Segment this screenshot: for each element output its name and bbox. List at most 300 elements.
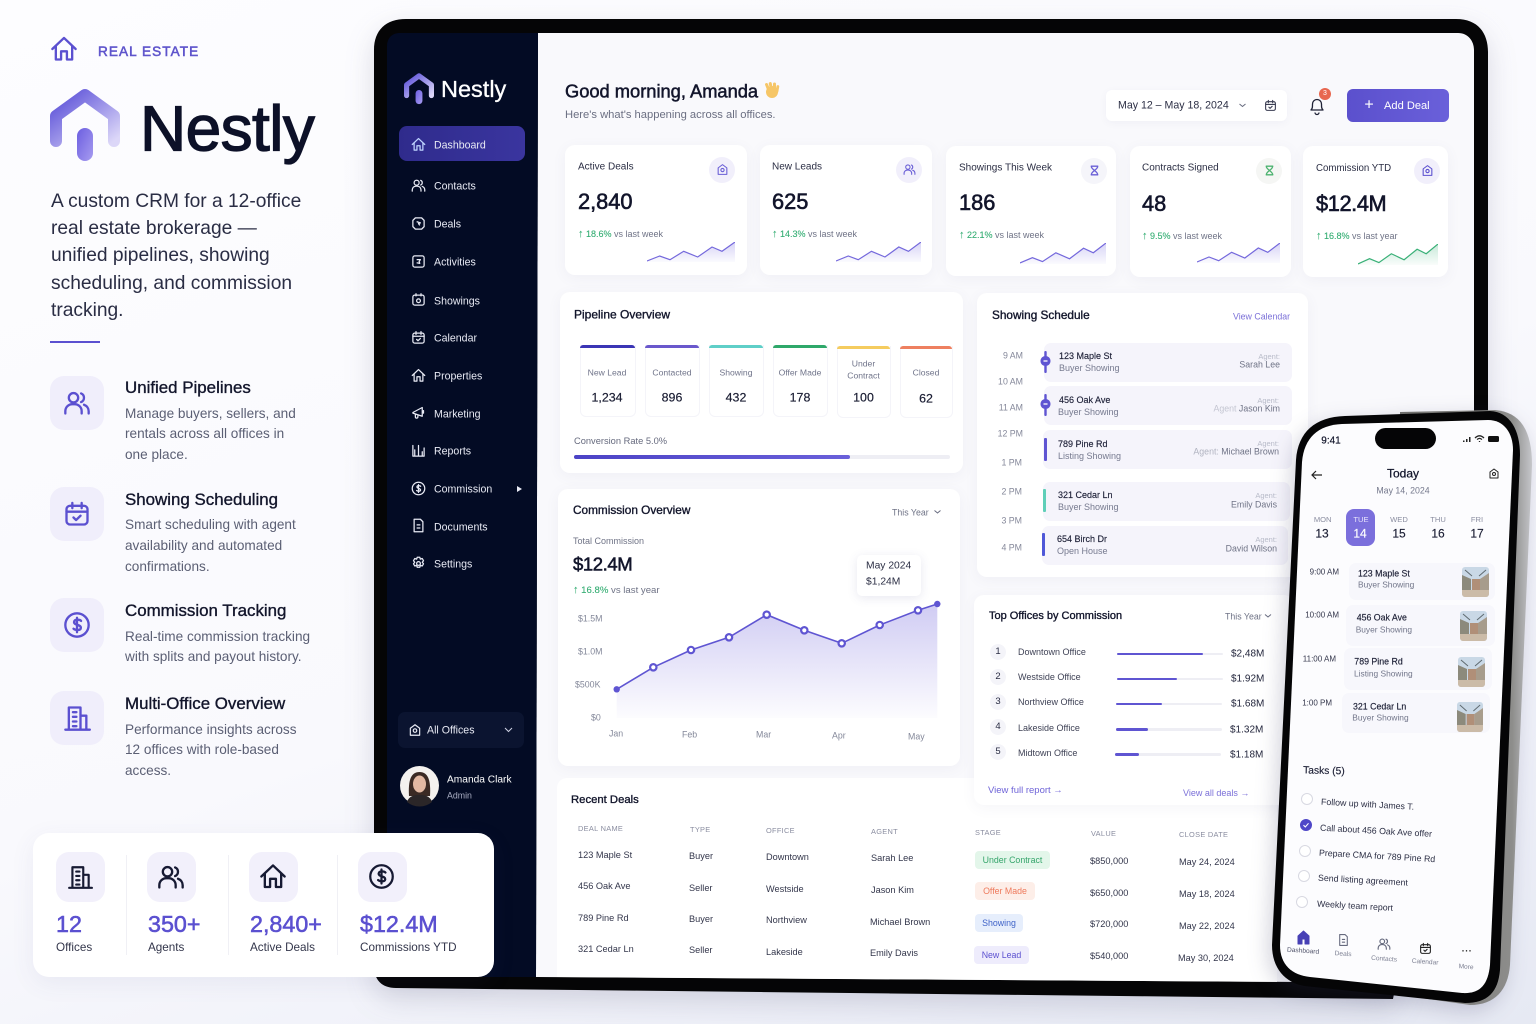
kpi change: ↑ 18.6% vs last week xyxy=(578,228,663,240)
stat: active deals: Active Deals xyxy=(250,941,315,954)
showing: 321 cedar ln: 321 Cedar Ln xyxy=(1058,490,1113,500)
panel: commission overview xyxy=(558,489,960,766)
nav label: reports: Reports xyxy=(434,445,471,457)
period selector: This Year xyxy=(892,507,929,517)
x axis labels: May xyxy=(908,731,925,741)
divider xyxy=(228,855,229,955)
week strip: MON xyxy=(1314,515,1332,524)
task: call about offer xyxy=(1300,819,1445,835)
showing: 456 oak ave: 456 Oak Ave xyxy=(1059,395,1110,405)
row: 456 oak ave: Jason Kim xyxy=(871,885,914,895)
feature text: Manage buyers, sellers, and xyxy=(125,406,296,420)
appointment: 123 maple st: 9:00 AM xyxy=(1310,568,1339,577)
icon: notification bell xyxy=(1310,98,1324,116)
showing: 456 oak ave: Buyer Showing xyxy=(1058,407,1119,417)
y axis labels: $1.5M xyxy=(578,613,602,623)
stat: offices: 12 xyxy=(56,911,82,937)
feature title: Unified Pipelines xyxy=(125,378,251,397)
row: 456 oak ave: May 18, 2024 xyxy=(1179,889,1235,899)
row: 123 maple st xyxy=(578,851,1234,869)
row: 456 oak ave: $650,000 xyxy=(1090,888,1128,898)
week strip: 13 xyxy=(1315,527,1329,541)
row: 321 cedar ln: New Lead xyxy=(982,950,1021,960)
category label: REAL ESTATE xyxy=(98,43,199,58)
task: send agreement: Send listing agreement xyxy=(1318,873,1408,888)
kpi value: $12.4M xyxy=(1316,191,1386,216)
plus sign: + xyxy=(1364,97,1374,114)
showing: 123 maple st: Agent: xyxy=(1258,352,1280,361)
panel: pipeline overview: 432 xyxy=(726,390,746,404)
icon: dashboard xyxy=(412,138,426,151)
feature text: Real-time commission tracking xyxy=(125,628,310,644)
icon: calendar xyxy=(1265,100,1276,111)
calendar link: View Calendar xyxy=(1233,311,1290,321)
feature title: Multi-Office Overview xyxy=(125,694,285,713)
time axis: 2 PM xyxy=(1001,486,1022,496)
accent rule xyxy=(50,341,100,343)
tab: calendar: Calendar xyxy=(1411,958,1439,967)
table header: VALUE xyxy=(1091,829,1116,838)
row: 123 maple st: Downtown xyxy=(766,852,809,862)
panel: pipeline overview: 1,234 xyxy=(591,390,623,404)
icon: expand arrow xyxy=(517,486,522,492)
row: 456 oak ave: Offer Made xyxy=(983,886,1027,896)
showing: 321 cedar ln: Emily Davis xyxy=(1231,499,1277,509)
showing: 789 pine rd: Listing Showing xyxy=(1058,451,1121,461)
feature text xyxy=(125,722,297,778)
time axis: 4 PM xyxy=(1001,542,1022,552)
marker: booked slot 1 xyxy=(1039,351,1052,373)
office rank 2 xyxy=(990,669,1270,687)
table header: CLOSE DATE xyxy=(1179,830,1228,839)
kpi card: active deals xyxy=(565,145,747,275)
row: 123 maple st: Buyer xyxy=(689,851,713,861)
line chart xyxy=(558,489,960,766)
appointment: 123 maple st xyxy=(1310,563,1495,600)
stat: active deals xyxy=(249,852,329,957)
row: 123 maple st: May 24, 2024 xyxy=(1179,857,1235,867)
user avatar xyxy=(400,766,439,806)
kpi value: 2,840 xyxy=(578,189,633,214)
office rank 4: 4 xyxy=(995,721,1001,732)
table header: STAGE xyxy=(975,828,1001,837)
nav label: settings: Settings xyxy=(434,558,472,570)
panel title: Pipeline Overview xyxy=(574,308,670,322)
stat: commissions ytd: Commissions YTD xyxy=(360,941,457,954)
stat: offices xyxy=(56,852,116,957)
panel: pipeline overview: Under xyxy=(852,358,875,368)
kpi icon xyxy=(709,157,735,183)
showing: 654 birch dr: 654 Birch Dr xyxy=(1057,534,1107,544)
showing: 789 pine rd: Agent: xyxy=(1257,439,1279,448)
phone mockup xyxy=(1270,408,1536,1008)
office rank 3: $1.68M xyxy=(1231,699,1264,710)
office rank 1: 1 xyxy=(995,646,1001,657)
date range picker xyxy=(1106,90,1287,121)
kpi value: 48 xyxy=(1142,191,1166,216)
screen title: Today xyxy=(1387,467,1419,481)
user role: Admin xyxy=(447,790,472,800)
office rank 3: 3 xyxy=(995,696,1001,707)
feature text: rentals across all offices in xyxy=(125,426,284,441)
feature text: one place. xyxy=(125,447,188,462)
time axis: 1 PM xyxy=(1001,457,1022,467)
row: 456 oak ave: 456 Oak Ave xyxy=(578,881,630,891)
panel: top offices by commission xyxy=(974,595,1294,805)
showing: 654 birch dr xyxy=(1042,526,1288,565)
showing: 789 pine rd: 789 Pine Rd xyxy=(1058,439,1108,449)
x axis labels: Jan xyxy=(609,728,623,738)
tab: contacts xyxy=(1369,936,1399,965)
feature text: 12 offices with role-based xyxy=(125,742,279,757)
appointment: 789 pine rd: 11:00 AM xyxy=(1303,655,1336,664)
nav label: calendar: Calendar xyxy=(434,332,477,344)
week strip: 17 xyxy=(1470,527,1484,541)
nav label: commission: Commission xyxy=(434,483,492,495)
appointment: 456 oak ave xyxy=(1308,605,1495,647)
feature text: Smart scheduling with agent xyxy=(125,517,296,532)
divider xyxy=(126,855,127,955)
showing: 456 oak ave: Agent: xyxy=(1257,396,1279,405)
stage: offer made xyxy=(773,345,828,417)
row: 456 oak ave: Seller xyxy=(689,883,712,893)
appointment: 456 oak ave: Buyer Showing xyxy=(1356,624,1412,634)
showing: 789 pine rd: Agent: Michael Brown xyxy=(1193,446,1279,456)
feature text: with splits and payout history. xyxy=(125,649,302,664)
all deals link: View all deals → xyxy=(1183,788,1249,798)
row: 789 pine rd xyxy=(578,914,1234,932)
task: weekly report: Weekly team report xyxy=(1316,899,1393,913)
row: 123 maple st: Under Contract xyxy=(983,855,1042,865)
week strip: TUE xyxy=(1353,515,1369,524)
row: 456 oak ave xyxy=(578,882,1234,900)
x axis labels xyxy=(606,726,928,742)
kpi title: Showings This Week xyxy=(959,162,1052,173)
appointment: 789 pine rd: 789 Pine Rd xyxy=(1354,656,1403,666)
week strip: 16 xyxy=(1431,527,1445,541)
appointment: 321 cedar ln: 321 Cedar Ln xyxy=(1353,701,1406,711)
row: 321 cedar ln: 321 Cedar Ln xyxy=(578,944,634,954)
tab: more: More xyxy=(1458,963,1474,971)
office rank 2: 2 xyxy=(995,671,1001,682)
task: send agreement xyxy=(1297,870,1442,886)
office rank 5: $1.18M xyxy=(1230,750,1263,761)
sparkline xyxy=(647,242,735,262)
stat: commissions ytd xyxy=(358,852,468,957)
row: 321 cedar ln: May 30, 2024 xyxy=(1178,953,1234,963)
y axis labels: $1.0M xyxy=(578,646,602,656)
feature text: availability and automated xyxy=(125,538,282,553)
panel title: Recent Deals xyxy=(571,794,639,806)
tab: more: ··· xyxy=(1462,946,1472,956)
office rank 5 xyxy=(990,744,1270,762)
table header xyxy=(578,826,1228,837)
office rank 1: $2,48M xyxy=(1231,649,1264,660)
icon: calendar xyxy=(412,331,425,344)
showing: 123 maple st: Sarah Lee xyxy=(1239,359,1280,369)
total label: Total Commission xyxy=(573,536,644,546)
stat: agents: 350+ xyxy=(148,911,200,937)
selected day xyxy=(1346,509,1375,546)
row: 123 maple st: Sarah Lee xyxy=(871,853,913,863)
table header: DEAL NAME xyxy=(578,824,623,833)
row: 123 maple st: $850,000 xyxy=(1090,856,1128,866)
showing: 321 cedar ln xyxy=(1043,482,1290,521)
kpi title: Active Deals xyxy=(578,162,634,173)
panel: pipeline overview: 100 xyxy=(853,390,874,404)
x axis labels: Apr xyxy=(832,730,846,740)
add deal button xyxy=(1347,89,1449,122)
icon: calendar xyxy=(65,502,89,526)
office rank 2: $1.92M xyxy=(1231,674,1264,685)
tasks heading: Tasks (5) xyxy=(1303,765,1345,777)
chart tooltip xyxy=(857,555,921,596)
icon: activities xyxy=(412,255,425,268)
feature: unified pipelines xyxy=(50,376,296,462)
icon: deals xyxy=(412,217,425,230)
row: 789 pine rd: 789 Pine Rd xyxy=(578,913,629,923)
feature text xyxy=(125,406,296,462)
back arrow xyxy=(1311,470,1323,480)
panel: pipeline overview: 178 xyxy=(790,390,810,404)
product description: tracking. xyxy=(51,300,124,321)
feature title: Showing Scheduling xyxy=(125,490,278,509)
kpi title: New Leads xyxy=(772,162,822,173)
row: 321 cedar ln xyxy=(578,946,1234,964)
tab: contacts: Contacts xyxy=(1371,955,1397,964)
row: 456 oak ave: Westside xyxy=(766,884,804,894)
icon: contacts xyxy=(412,180,426,192)
office rank 4: Lakeside Office xyxy=(1018,723,1080,733)
office rank 3 xyxy=(990,694,1270,712)
office rank 3: Northview Office xyxy=(1018,697,1084,707)
week strip: WED xyxy=(1390,515,1408,524)
y axis labels: $0 xyxy=(591,712,601,722)
icon: marketing xyxy=(412,406,424,419)
feature title: Commission Tracking xyxy=(125,601,286,620)
sidebar brand name: Nestly xyxy=(441,76,506,102)
total change: ↑ 16.8% vs last year xyxy=(573,584,660,596)
office rank 4 xyxy=(990,719,1270,737)
panel: pipeline overview: Closed xyxy=(913,367,939,377)
row: 321 cedar ln: $540,000 xyxy=(1090,951,1128,961)
full report link: View full report → xyxy=(988,784,1063,795)
icon: office xyxy=(410,724,420,736)
week strip: THU xyxy=(1430,515,1446,524)
sparkline xyxy=(1020,243,1106,264)
kpi change: ↑ 14.3% vs last week xyxy=(772,228,857,240)
row: 789 pine rd: Michael Brown xyxy=(870,917,930,927)
tab: calendar xyxy=(1410,941,1440,969)
tab: deals: Deals xyxy=(1334,950,1352,958)
sparkline xyxy=(836,242,921,262)
notification badge: 3 xyxy=(1323,90,1327,97)
showing: 654 birch dr: Agent: xyxy=(1255,535,1277,544)
week strip: FRI xyxy=(1471,515,1483,524)
appointment: 123 maple st: 123 Maple St xyxy=(1358,568,1410,578)
table header: AGENT xyxy=(871,827,898,836)
greeting heading: Good morning, Amanda xyxy=(565,81,758,102)
time axis: 9 AM xyxy=(1003,350,1023,360)
time axis: 3 PM xyxy=(1001,515,1022,525)
task: follow up: Follow up with James T. xyxy=(1320,797,1414,812)
week strip: 15 xyxy=(1392,527,1406,541)
nav label: showings: Showings xyxy=(434,295,480,307)
nav label: activities: Activities xyxy=(434,256,476,268)
stage: new lead xyxy=(580,345,636,417)
stat: agents: Agents xyxy=(148,941,184,954)
stat: agents xyxy=(147,852,217,957)
task: follow up xyxy=(1300,793,1445,809)
showing: 654 birch dr: David Wilson xyxy=(1226,543,1277,553)
status time: 9:41 xyxy=(1321,436,1341,447)
kpi card: showings this week xyxy=(946,146,1116,276)
panel: pipeline overview: Contract xyxy=(847,370,880,380)
office rank 1: Downtown Office xyxy=(1018,647,1086,657)
tab: deals xyxy=(1329,932,1359,960)
icon: chevron xyxy=(933,509,942,515)
task: prepare cma: Prepare CMA for 789 Pine Rd xyxy=(1319,848,1435,864)
panel title: Commission Overview xyxy=(573,503,690,517)
kpi icon xyxy=(1256,158,1282,184)
stat: offices: Offices xyxy=(56,941,92,954)
marker: booked slot 2 xyxy=(1039,394,1052,416)
user name: Amanda Clark xyxy=(447,774,512,785)
product description: unified pipelines, showing xyxy=(51,245,270,266)
icon: dollar xyxy=(64,612,90,638)
date range text: May 12 – May 18, 2024 xyxy=(1118,99,1229,111)
nav label: marketing: Marketing xyxy=(434,408,481,420)
sparkline xyxy=(1197,243,1280,263)
nav label: documents: Documents xyxy=(434,521,488,533)
stage: showing xyxy=(709,345,764,417)
button label: Add Deal xyxy=(1384,100,1430,112)
feature text: Performance insights across xyxy=(125,722,297,736)
icon: people xyxy=(64,392,90,415)
icon: settings xyxy=(412,556,424,568)
time axis: 11 AM xyxy=(999,402,1023,412)
office selector label: All Offices xyxy=(427,724,474,736)
showing: 321 cedar ln: Buyer Showing xyxy=(1058,502,1119,512)
feature text xyxy=(125,628,310,664)
office rank 5: Midtown Office xyxy=(1018,748,1077,758)
task: weekly report xyxy=(1296,896,1441,912)
nav label: dashboard: Dashboard xyxy=(434,139,486,151)
icon: chevron xyxy=(1264,613,1272,619)
icon: chevron xyxy=(1239,104,1246,107)
kpi icon xyxy=(1414,158,1440,184)
kpi value: 625 xyxy=(772,189,808,214)
product description xyxy=(51,190,301,321)
panel title: Showing Schedule xyxy=(992,308,1090,322)
kpi title: Contracts Signed xyxy=(1142,163,1219,174)
showing: 654 birch dr: Open House xyxy=(1057,546,1108,556)
nav label: deals: Deals xyxy=(434,218,461,230)
showing: 456 oak ave xyxy=(1044,386,1292,425)
icon: reports xyxy=(412,444,425,457)
kpi change: ↑ 22.1% vs last week xyxy=(959,229,1044,241)
feature: showing scheduling xyxy=(50,487,296,574)
appointment: 321 cedar ln: 1:00 PM xyxy=(1302,699,1332,708)
table header: TYPE xyxy=(690,825,711,834)
status icons xyxy=(1462,434,1500,443)
appointment: 456 oak ave: 456 Oak Ave xyxy=(1357,612,1407,622)
panel: pipeline overview: New Lead xyxy=(588,367,626,377)
row: 789 pine rd: Buyer xyxy=(689,914,713,924)
icon: commission xyxy=(412,482,426,496)
feature: multi-office overview xyxy=(50,691,297,778)
feature text: access. xyxy=(125,763,171,778)
icon: properties xyxy=(412,368,426,382)
week strip xyxy=(1310,512,1490,542)
panel title: Top Offices by Commission xyxy=(989,610,1122,622)
category icon: house outline xyxy=(51,36,77,61)
kpi icon xyxy=(1081,158,1107,184)
product description: real estate brokerage — xyxy=(51,218,257,239)
stage: under contract xyxy=(837,346,891,418)
greeting subtitle: Here's what's happening across all offices. xyxy=(565,109,776,121)
appointment: 321 cedar ln xyxy=(1304,693,1490,733)
appointment: 789 pine rd xyxy=(1306,648,1492,690)
period selector: This Year xyxy=(1225,611,1262,621)
x axis labels: Mar xyxy=(756,729,771,739)
chart tooltip: May 2024 xyxy=(866,561,911,572)
time axis xyxy=(995,348,1025,554)
showing: 321 cedar ln: Agent: xyxy=(1255,491,1277,500)
row: 789 pine rd: $720,000 xyxy=(1090,919,1128,929)
brand logo mark xyxy=(50,89,120,161)
total value: $12.4M xyxy=(573,553,632,574)
appointment: 321 cedar ln: Buyer Showing xyxy=(1352,712,1409,722)
feature text xyxy=(125,517,296,574)
screen date: May 14, 2024 xyxy=(1376,485,1430,495)
x axis labels: Feb xyxy=(682,729,697,739)
product description: scheduling, and commission xyxy=(51,273,292,294)
showing: 456 oak ave: Agent Jason Kim xyxy=(1213,403,1280,413)
kpi title: Commission YTD xyxy=(1316,163,1391,174)
stat: commissions ytd: $12.4M xyxy=(360,911,438,937)
tab: more xyxy=(1452,946,1482,974)
icon: showings xyxy=(412,293,425,306)
office rank 2: Westside Office xyxy=(1018,672,1081,682)
row: 789 pine rd: Northview xyxy=(766,915,807,925)
office selector xyxy=(398,712,524,748)
dynamic island xyxy=(1375,428,1436,449)
sidebar xyxy=(387,33,538,977)
time axis: 10 AM xyxy=(998,376,1023,386)
panel: pipeline overview: 62 xyxy=(919,391,933,405)
kpi change: ↑ 9.5% vs last week xyxy=(1142,230,1222,242)
tab: dashboard xyxy=(1288,928,1318,958)
stage: contacted xyxy=(645,345,700,417)
table header: OFFICE xyxy=(766,826,795,835)
product description: A custom CRM for a 12-office xyxy=(51,190,301,212)
kpi card: commission ytd xyxy=(1303,146,1448,277)
icon: chevron xyxy=(504,728,512,732)
feature: commission tracking xyxy=(50,598,310,664)
panel: pipeline overview: Offer Made xyxy=(779,367,821,377)
task: prepare cma xyxy=(1298,845,1443,861)
panel: pipeline overview: Showing xyxy=(720,367,752,377)
divider xyxy=(337,855,338,955)
icon: documents xyxy=(414,518,424,532)
y axis labels xyxy=(575,612,605,724)
kpi card: new leads xyxy=(760,145,932,275)
appointment: 456 oak ave: 10:00 AM xyxy=(1305,611,1339,620)
sidebar logo xyxy=(404,73,434,104)
brand name: Nestly xyxy=(140,92,314,164)
office rank 1 xyxy=(990,644,1270,662)
